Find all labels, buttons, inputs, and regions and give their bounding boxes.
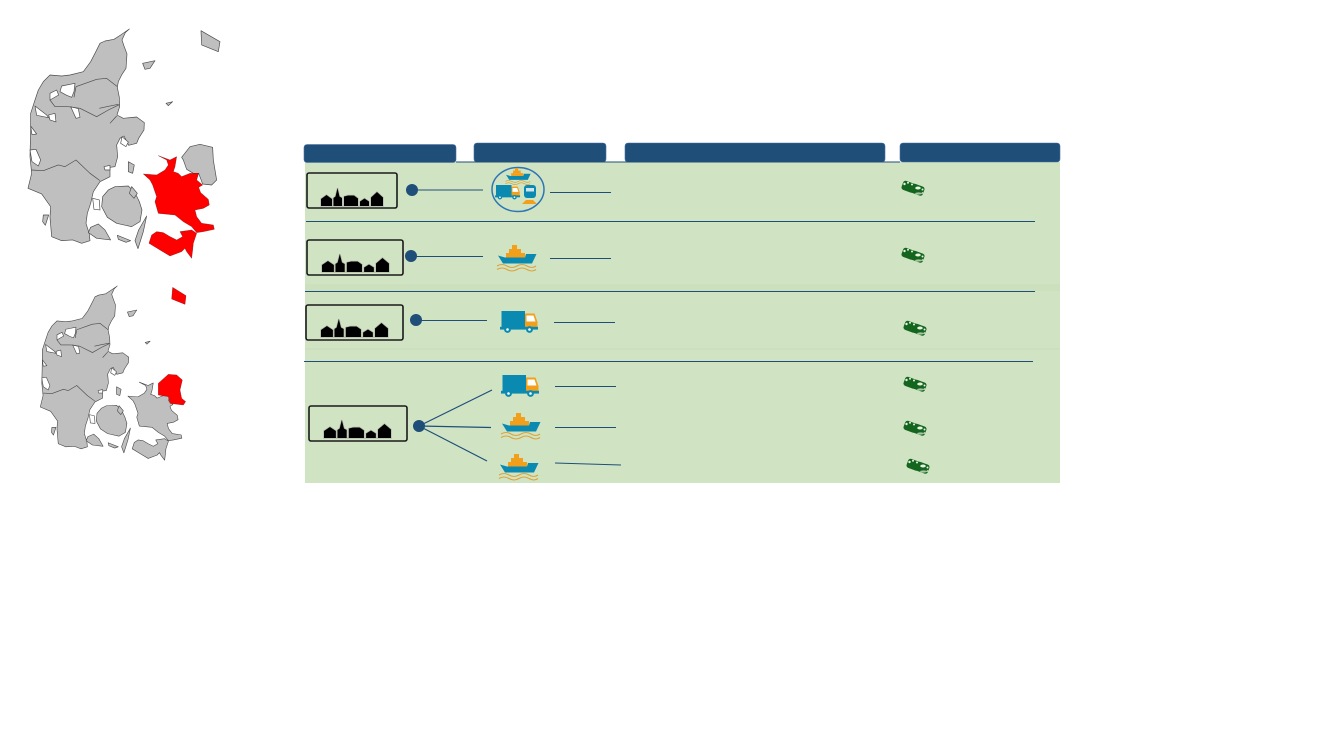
row 1: connector [406, 184, 611, 196]
row dividers [304, 162, 1035, 362]
row 2: ship icon [497, 245, 536, 271]
icon: train [522, 185, 537, 204]
row 4: money icon, middle [903, 420, 927, 436]
row 2: connector [405, 250, 611, 262]
row 3: city box [306, 305, 403, 340]
map: Denmark with Copenhagen and Bornholm highlighted [40, 286, 186, 460]
row 1: money icon [901, 180, 925, 196]
row 4: ship icon, middle [501, 413, 540, 439]
row 3: truck icon [500, 311, 538, 333]
row 4: truck icon [501, 375, 539, 397]
row 4: money icon, bottom [906, 458, 930, 474]
row 4: city box [309, 406, 407, 441]
panel: green table background [305, 162, 1060, 483]
row 1: multimodal icon [492, 168, 544, 212]
row 1: city box [307, 173, 397, 208]
row 3: money icon [903, 320, 927, 336]
map: Denmark with Zealand highlighted [28, 29, 220, 258]
table header bars [304, 143, 1060, 162]
row 4: ship icon, bottom [499, 454, 538, 480]
row 4: branching connector [413, 386, 621, 465]
row 3: connector [410, 314, 615, 326]
row 2: money icon [901, 247, 925, 263]
row 4: money icon, top [903, 376, 927, 392]
row 2: city box [307, 240, 403, 275]
